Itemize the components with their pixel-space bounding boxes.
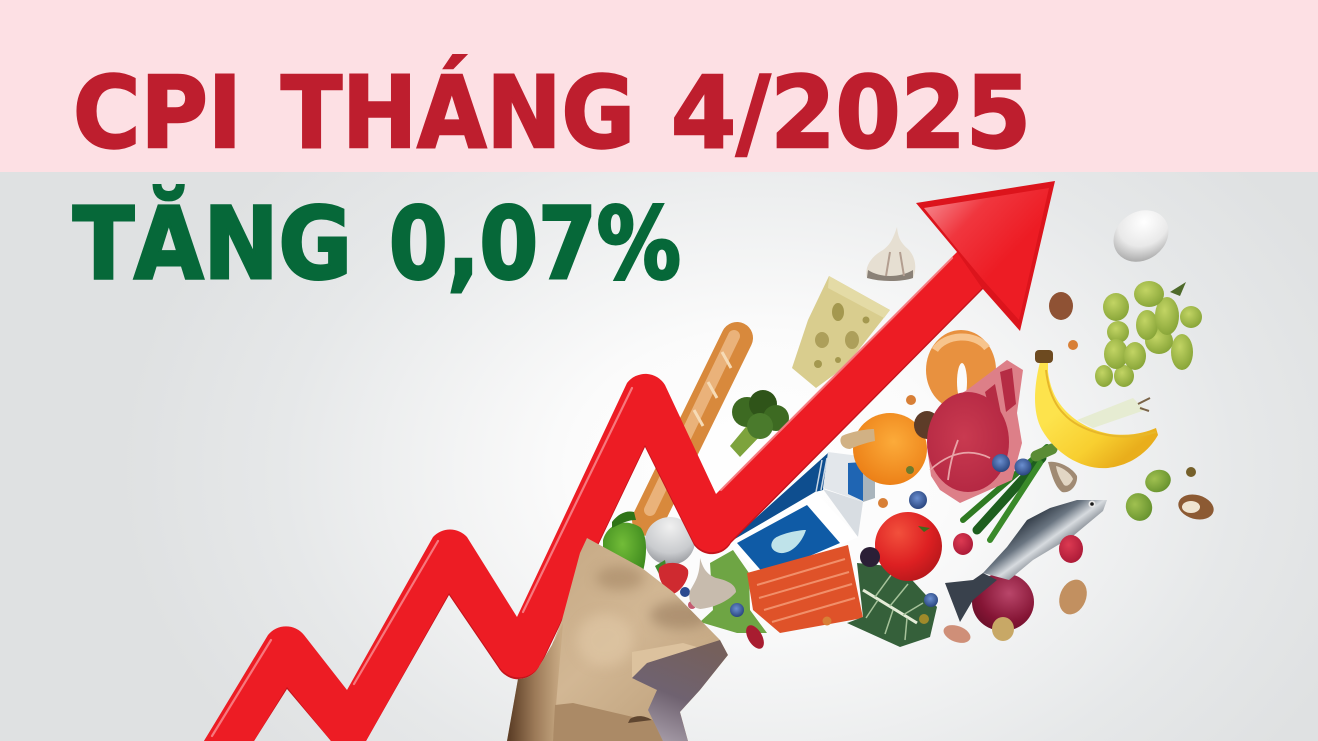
icon: almond: [1054, 575, 1092, 619]
icon: grapes: [1095, 281, 1202, 387]
icon: olives: [1121, 466, 1174, 525]
arrowhead: [916, 181, 1055, 331]
icon: shallot: [1048, 462, 1077, 492]
arrow shadow: [204, 242, 1000, 741]
icon: paper bag: [505, 538, 728, 741]
icon: lettuce: [700, 550, 767, 633]
arrow: rising red line chart with arrowhead: [204, 181, 1055, 741]
icon: white leek: [1077, 398, 1150, 428]
icon: bell pepper: [603, 511, 646, 584]
icon: egg behind bag: [645, 517, 695, 565]
title: CPI THÁNG 4/2025: [73, 54, 1031, 171]
arrow body: [204, 240, 1000, 741]
icon: fish: [945, 500, 1107, 622]
icon: banana: [1035, 350, 1158, 468]
icon: blackberry: [860, 547, 880, 567]
food in front of the arrow: [505, 281, 1216, 741]
icon: bagel: [926, 330, 996, 410]
subtitle: TĂNG 0,07%: TĂNG: [73, 185, 352, 302]
icon: red bean: [742, 622, 768, 652]
icon: mushroom: [914, 411, 940, 439]
icon: brazil nut: [1176, 491, 1216, 523]
icon: small berries in bag mouth: [680, 587, 696, 609]
icon: bean: [941, 622, 973, 646]
icon: cheese: [792, 276, 890, 388]
icon: spring onion: [963, 447, 1052, 540]
title: CPI THÁNG 4/2025: THÁNG: [281, 54, 635, 171]
icon: meat steak: [927, 360, 1023, 503]
icon: baguette: [648, 336, 737, 520]
icon: orange: [853, 413, 927, 485]
subtitle: TĂNG 0,07%: [73, 185, 681, 302]
icon: garlic top: [866, 227, 915, 281]
icon: egg: [1103, 200, 1179, 272]
background: grey-white gradient: [0, 172, 1318, 741]
title: CPI THÁNG 4/2025: 4/2025: [671, 56, 1031, 171]
icon: salmon fillet: [747, 545, 863, 633]
icon: raspberry left: [953, 533, 973, 555]
food behind the arrow: [603, 200, 1179, 633]
icon: strawberry: [655, 560, 688, 594]
icon: hazelnut: [1049, 292, 1073, 320]
icon: milk carton: [728, 452, 875, 580]
title: CPI THÁNG 4/2025: CPI: [73, 56, 242, 171]
icon: small nuts: [822, 340, 1196, 626]
subtitle: TĂNG 0,07%: 0,07%: [389, 187, 681, 302]
arrow highlight: [212, 258, 952, 736]
icon: garlic clove in bag: [689, 558, 736, 609]
icon: kale leaf: [847, 563, 937, 647]
icon: broccoli: [730, 390, 789, 457]
header band: pink: [0, 0, 1318, 172]
icon: red onion: [972, 573, 1034, 631]
icon: blueberries: [730, 454, 1032, 617]
icon: tomato: [875, 512, 942, 581]
icon: raspberry right: [1059, 535, 1083, 563]
icon: peanut: [840, 429, 875, 449]
icon: pistachio: [992, 617, 1014, 641]
bag shading: [505, 566, 728, 741]
